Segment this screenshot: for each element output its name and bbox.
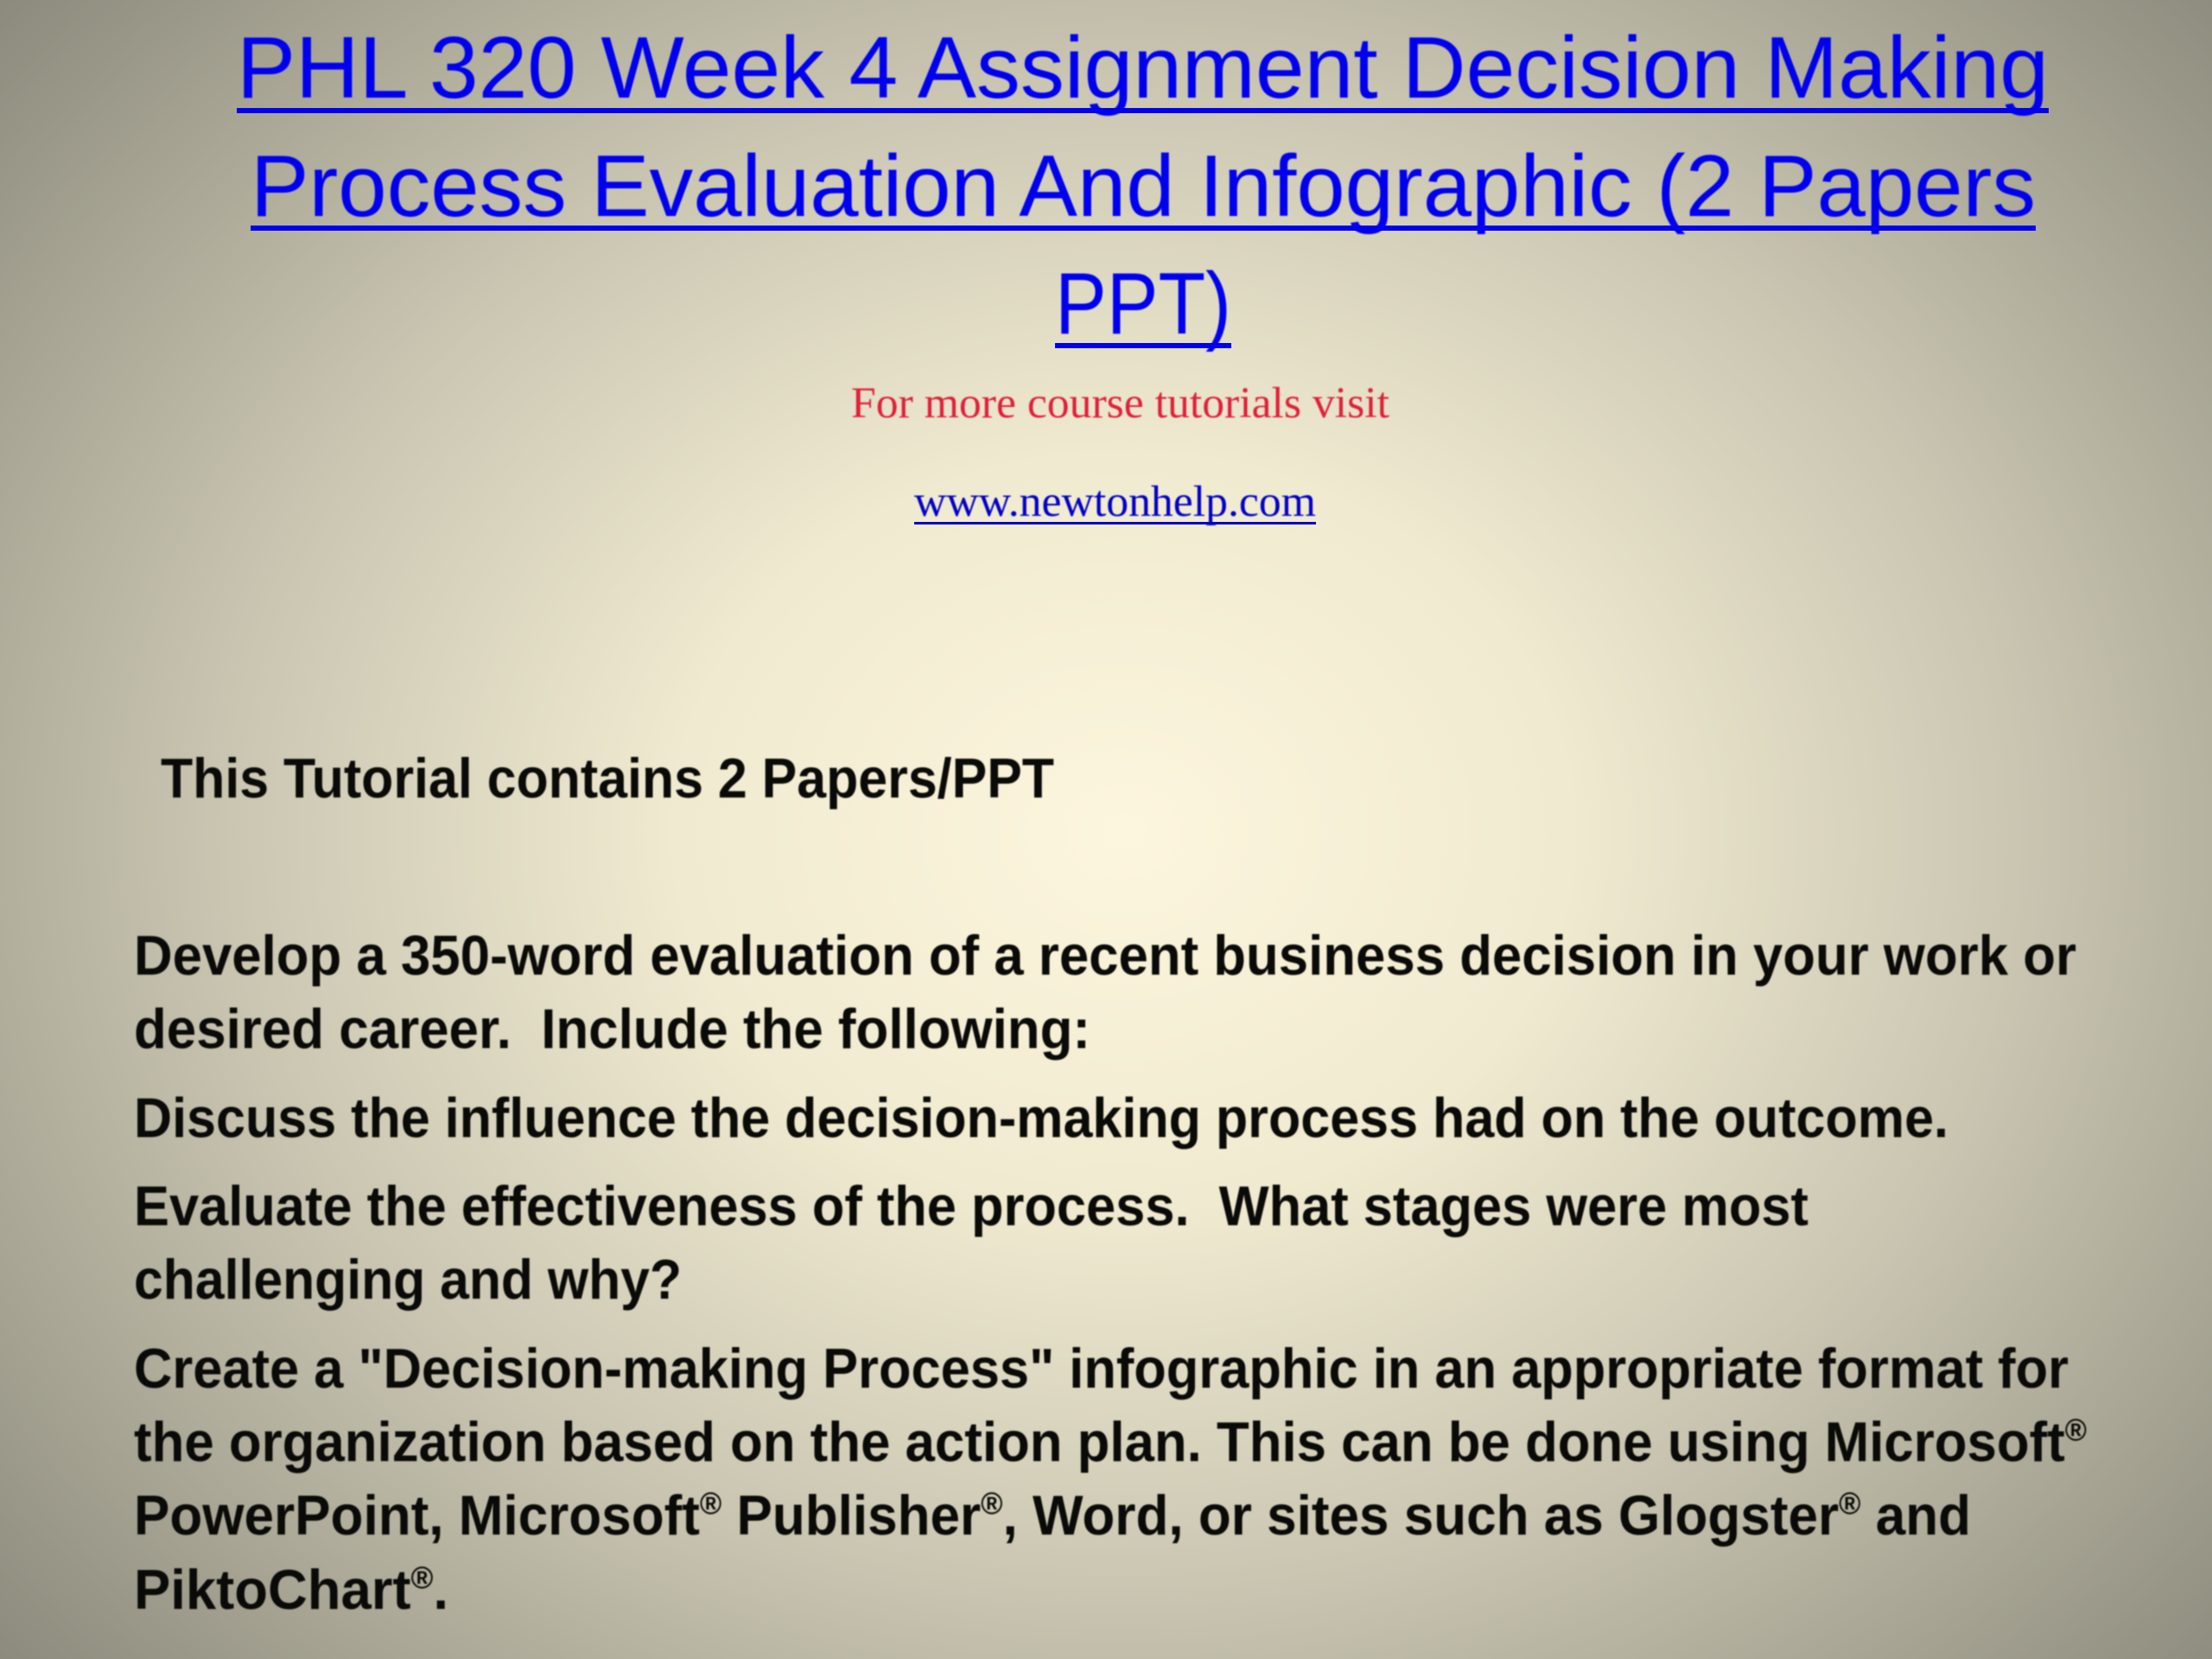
paragraph: create infographic: ® [981, 1485, 1003, 1521]
paragraph: evaluate effectiveness [134, 1174, 1808, 1311]
paragraph: create infographic: . [433, 1558, 448, 1621]
paragraph: create infographic: Publisher [721, 1484, 981, 1547]
paragraph: create infographic: and [1860, 1484, 1971, 1547]
paragraph: create infographic [134, 1337, 2087, 1621]
paragraph: create infographic: ® [411, 1560, 433, 1595]
paragraph: create infographic: ® [2065, 1412, 2087, 1447]
paragraph: evaluate effectiveness: challenging and why? [134, 1248, 682, 1311]
paragraph: create infographic: , Word, or sites such as Glogster [1003, 1484, 1839, 1547]
paragraph: develop evaluation: Develop a 350-word evaluation of a recent business decision in your work or [134, 924, 2076, 987]
title [237, 20, 2049, 353]
title line 2: Process Evaluation And Infographic (2 Papers [251, 138, 2036, 235]
paragraph: develop evaluation [134, 924, 2076, 1060]
paragraph: create infographic: ® [1839, 1485, 1860, 1521]
heading: tutorial contents: This Tutorial contains 2 Papers/PPT [161, 747, 1054, 810]
paragraph: create infographic: ® [700, 1485, 721, 1521]
paragraph: create infographic: PowerPoint, Microsoft [134, 1484, 727, 1547]
paragraph: create infographic: Create a "Decision-making Process" infographic in an appropriate format for [134, 1337, 2069, 1400]
website link: www.newtonhelp.com [914, 478, 1316, 526]
title line 3: PPT) [1055, 256, 1231, 353]
subtitle: course tutorials line: For more course tutorials visit [851, 379, 1389, 428]
title line 1: PHL 320 Week 4 Assignment Decision Making [237, 20, 2049, 117]
paragraph: discuss influence: Discuss the influence the decision-making process had on the outcome. [134, 1086, 1948, 1149]
paragraph: create infographic: PiktoChart [134, 1558, 418, 1621]
body text block [134, 924, 2087, 1621]
paragraph: develop evaluation: desired career. Include the following: [134, 997, 1090, 1060]
paragraph: evaluate effectiveness: Evaluate the effectiveness of the process. What stages were most [134, 1174, 1808, 1237]
paragraph: create infographic: the organization based on the action plan. This can be done using Microsoft [134, 1410, 2165, 1473]
